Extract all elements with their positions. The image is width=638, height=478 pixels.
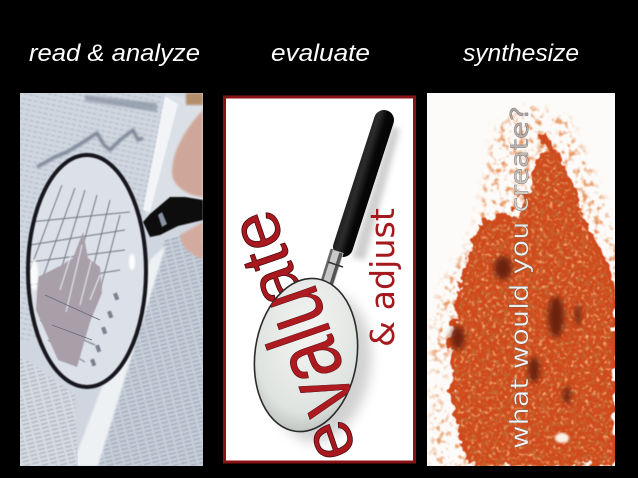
magnifier handle xyxy=(322,120,384,285)
finger xyxy=(172,110,203,197)
lens highlights xyxy=(129,254,135,270)
lens xyxy=(28,155,146,387)
panel: magnifier over financial page xyxy=(20,93,203,466)
panel: red powder image xyxy=(427,93,620,466)
handle xyxy=(143,197,203,237)
panel: evaluate and adjust magnifier xyxy=(213,97,414,473)
text: & adjust: & adjust xyxy=(363,208,402,347)
text: what would you create?: what would you create? xyxy=(505,106,534,449)
scattered powder xyxy=(432,105,620,466)
caption: evaluate: evaluate xyxy=(271,40,370,67)
chart line on page xyxy=(37,130,143,167)
magnified letters in lens: valu xyxy=(236,275,375,431)
tabletop corner xyxy=(186,93,203,105)
white gap xyxy=(555,433,569,443)
caption: read & analyze: read & analyze xyxy=(29,40,200,67)
caption: synthesize: synthesize xyxy=(463,40,579,67)
lens rim xyxy=(28,155,146,387)
page heading xyxy=(85,95,157,112)
shadow of magnifier xyxy=(352,125,400,260)
powder mass xyxy=(450,133,615,466)
powder pits xyxy=(451,256,581,404)
lens xyxy=(254,278,358,432)
word: evaluate: evaluate xyxy=(213,201,371,473)
